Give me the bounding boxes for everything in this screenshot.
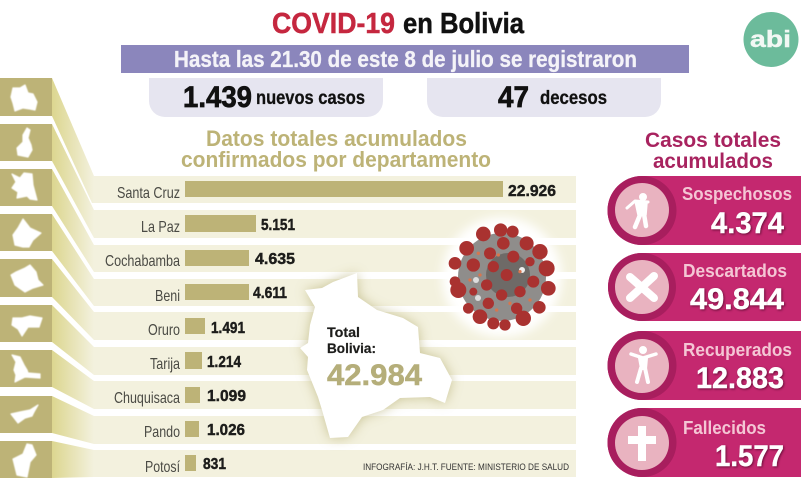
subtitle banner: Hasta las 21.30 de este 8 de julio se registraron [174, 46, 637, 72]
title: COVID-19 [272, 8, 395, 40]
row: Cochabamba [105, 250, 295, 270]
row: Tarija [150, 352, 241, 373]
panel: Descartados [608, 253, 801, 321]
row: Santa Cruz: 22.926 [508, 183, 556, 200]
panel: Sospechosos: 4.374 [711, 207, 784, 240]
row: Tarija: Tarija [150, 356, 180, 373]
panel: Recuperados [608, 331, 801, 400]
title [272, 8, 525, 40]
row: Potosí: 831 [203, 456, 226, 473]
credit line: INFOGRAFÍA: J.H.T. FUENTE: MINISTERIO DE SALUD [363, 462, 569, 473]
connectors from department icons to chart rows [52, 78, 94, 478]
panel: Recuperados: Recuperados [683, 339, 792, 360]
row: Chuquisaca: 1.099 [207, 388, 246, 405]
row stripes [94, 176, 576, 477]
row: Oruro: 1.491 [211, 320, 245, 337]
panel: Fallecidos: 1.577 [715, 440, 784, 473]
map: Bolivia total: Bolivia: [327, 340, 376, 356]
row: Tarija: 1.214 [207, 354, 241, 371]
row: La Paz: 5.151 [261, 217, 295, 234]
logo: abi: abi [750, 26, 791, 52]
icon: recovered person [631, 346, 656, 382]
map: Bolivia total [300, 273, 452, 438]
panel heading: total cases [645, 129, 781, 173]
chart heading: Datos totales acumulados [206, 126, 467, 151]
row: Potosí: Potosí [145, 459, 180, 476]
row: Beni: 4.611 [253, 285, 287, 302]
panel: Sospechosos: Sospechosos [682, 183, 792, 204]
icon: cross [628, 426, 656, 461]
panel heading: total cases: Casos totales [645, 129, 781, 152]
row: Oruro: Oruro [148, 322, 180, 339]
row: Oruro [148, 318, 245, 339]
map: Bolivia total: 42.984 [327, 359, 422, 392]
panel: Recuperados: 12.883 [696, 362, 784, 395]
panel: Fallecidos: Fallecidos [683, 417, 766, 438]
logo: abi [744, 12, 798, 67]
department icon column [0, 78, 52, 478]
callout: deaths [427, 78, 661, 117]
row: Beni [155, 284, 287, 305]
row: Chuquisaca [114, 387, 246, 407]
row: Cochabamba: Cochabamba [105, 253, 180, 270]
chart heading [181, 126, 491, 172]
bar chart: confirmed cases by department [105, 181, 556, 476]
title: en Bolivia [403, 8, 525, 40]
row: Pando [144, 421, 245, 441]
panel: Descartados: Descartados [683, 260, 787, 281]
callout: new cases: 1.439 [183, 81, 252, 114]
callout: deaths: 47 [498, 81, 529, 114]
panel: Fallecidos [608, 408, 801, 477]
panel: Sospechosos [608, 176, 801, 245]
icon: cross mark [630, 276, 654, 298]
row: Santa Cruz [117, 181, 556, 202]
row: Pando: 1.026 [207, 422, 245, 439]
row: Cochabamba: 4.635 [255, 251, 295, 268]
row: La Paz: La Paz [141, 219, 180, 236]
row: Pando: Pando [144, 424, 180, 441]
row: La Paz [141, 215, 295, 236]
icon: coronavirus [442, 217, 562, 337]
row: Potosí [145, 455, 226, 476]
row: Beni: Beni [155, 288, 180, 305]
panel: Descartados: 49.844 [690, 283, 784, 316]
icon: sick person [627, 194, 648, 227]
callout: new cases [149, 78, 383, 117]
callout: new cases: nuevos casos [256, 88, 365, 109]
panel heading: total cases: acumulados [653, 150, 773, 173]
row: Santa Cruz: Santa Cruz [117, 185, 180, 202]
callout: deaths: decesos [540, 88, 607, 109]
row: Chuquisaca: Chuquisaca [114, 390, 180, 407]
map: Bolivia total: Total [327, 324, 360, 340]
chart heading: confirmados por departamento [181, 147, 491, 172]
